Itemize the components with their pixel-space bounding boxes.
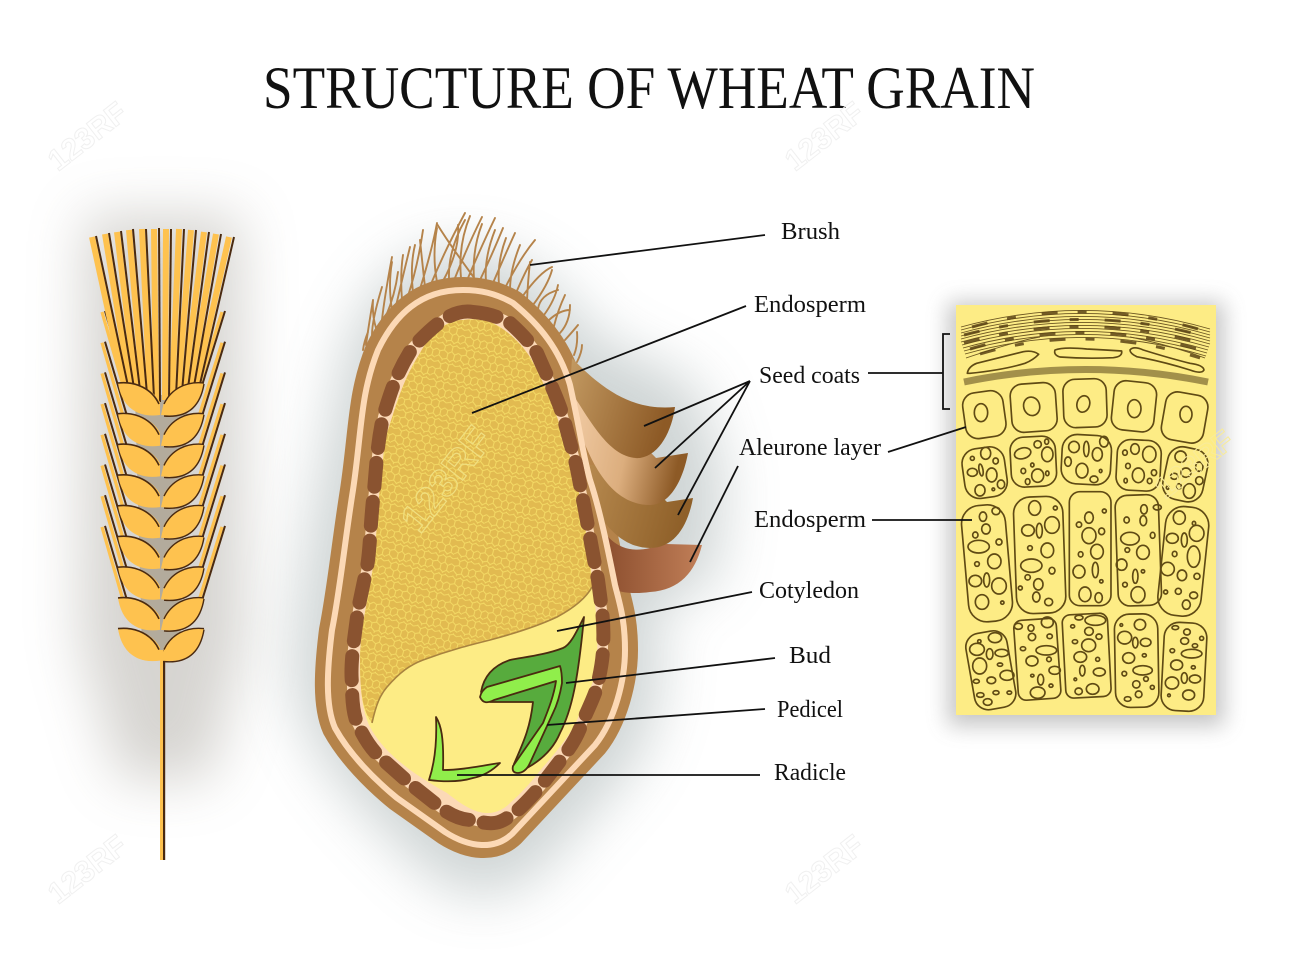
stock watermarks: 123RF bbox=[1149, 424, 1240, 506]
wheat leaf pairs bbox=[118, 383, 204, 662]
stock watermarks: 123RF bbox=[42, 829, 133, 911]
grey gaps between leaves bbox=[135, 395, 188, 650]
stock watermarks: 123RF bbox=[779, 829, 870, 911]
label: Endosperm (section): Endosperm bbox=[754, 507, 866, 533]
aleurone cream layer bbox=[351, 312, 603, 823]
label: Brush: Brush bbox=[781, 219, 840, 245]
panel background bbox=[956, 305, 1216, 715]
cream seed coat band bbox=[328, 290, 625, 845]
stock watermarks: 123RF bbox=[392, 419, 501, 541]
aleurone brown capsules bbox=[351, 312, 603, 823]
leader lines bbox=[457, 235, 972, 775]
dense fibre band bbox=[964, 370, 1208, 382]
seed coat fibres bbox=[961, 310, 1210, 358]
radicle bbox=[429, 717, 500, 781]
stock watermarks bbox=[42, 96, 1240, 911]
label: Pedicel: Pedicel bbox=[777, 697, 843, 723]
stock watermarks: 123RF bbox=[42, 96, 133, 178]
title: STRUCTURE OF WHEAT GRAIN bbox=[263, 55, 1035, 121]
label: Radicle: Radicle bbox=[774, 760, 846, 786]
label: Endosperm: Endosperm bbox=[754, 292, 866, 318]
aleurone layer cells bbox=[961, 378, 1210, 445]
seed coat flaps bbox=[570, 358, 702, 593]
pedicel bbox=[480, 666, 562, 773]
soft background shadows bbox=[80, 215, 1224, 894]
endosperm texture bbox=[360, 319, 592, 723]
grain cross-section bbox=[328, 213, 702, 845]
stock watermarks: 123RF bbox=[779, 96, 870, 178]
outer husk bbox=[328, 290, 625, 845]
label: Bud: Bud bbox=[789, 643, 831, 669]
label: Seed coats: Seed coats bbox=[759, 363, 860, 389]
brush hairs bbox=[363, 213, 582, 362]
top awn fan bbox=[92, 228, 234, 402]
wheat ear illustration bbox=[92, 228, 234, 860]
bud leaf bbox=[481, 617, 584, 768]
wheat stem bbox=[160, 640, 165, 860]
seed coats bracket bbox=[943, 334, 950, 409]
endosperm embryo boundary bbox=[372, 587, 592, 723]
endosperm cells row one bbox=[960, 434, 1211, 505]
label: Cotyledon: Cotyledon bbox=[759, 578, 859, 604]
endosperm and embryo body bbox=[360, 319, 597, 813]
label: Aleurone layer: Aleurone layer bbox=[739, 435, 881, 461]
endosperm cells rows two and three bbox=[960, 492, 1211, 712]
flattened cells bbox=[967, 348, 1204, 373]
side awns bbox=[102, 311, 225, 607]
micro section panel bbox=[956, 305, 1216, 715]
